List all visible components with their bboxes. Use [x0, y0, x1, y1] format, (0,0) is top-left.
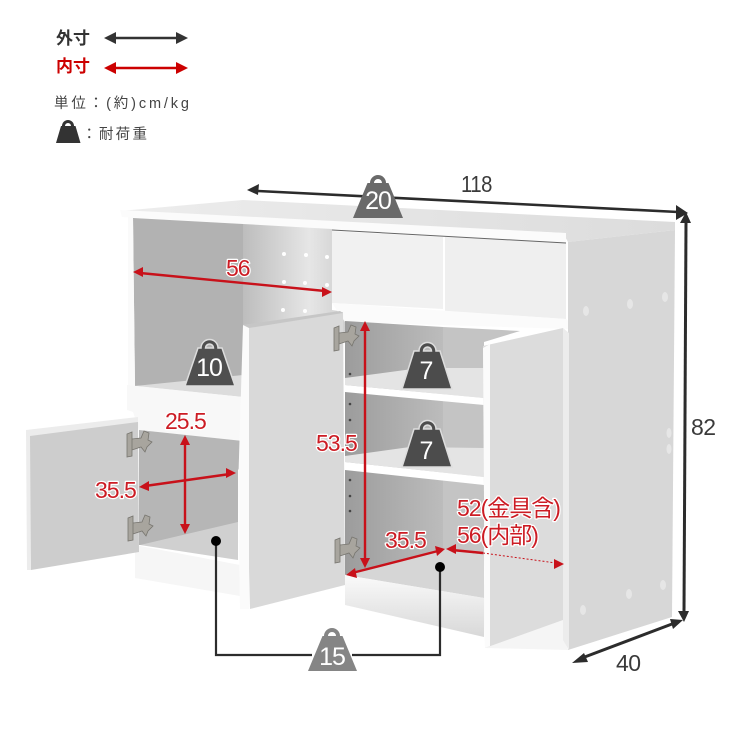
legend: units: 単位：(約)cm/kg [54, 95, 189, 112]
weight 10 [185, 340, 235, 386]
centre-right compartment left back wall [345, 321, 443, 575]
centre open compartment back [243, 224, 345, 340]
right side panel [568, 230, 675, 650]
centre-right compartment floor [345, 549, 484, 598]
bottom compartment connector [216, 541, 440, 655]
centre door [238, 311, 345, 609]
side panel dowel marks [580, 292, 672, 615]
red dimension 56 width [133, 255, 332, 297]
weight 20: 20 [365, 187, 391, 215]
legend: load capacity label: ：耐荷重 [82, 126, 147, 143]
centre-right compartment right back wall [443, 327, 520, 555]
shelf surface [135, 375, 243, 397]
red dimension 35.5 left: 35.5 [95, 477, 136, 503]
height dimension 82 [678, 212, 716, 622]
connector dots [211, 536, 445, 572]
width dimension 118 [247, 171, 688, 220]
left open compartment back [133, 218, 243, 386]
upper shelf [345, 368, 484, 398]
weight 7 lower: 7 [420, 437, 433, 465]
red dimension 25.5 height [165, 408, 206, 534]
legend [54, 29, 189, 143]
right door floor [485, 620, 568, 650]
red dimension 25.5 height: 25.5 [165, 408, 206, 434]
legend: inner dimension label: 内寸 [56, 57, 90, 76]
white band under left shelf [127, 385, 243, 441]
red dimension 53.5 height [316, 321, 370, 568]
lower left compartment floor [140, 522, 238, 560]
left side panel [128, 217, 135, 386]
legend: outer dimension arrow [104, 32, 188, 44]
lower left base [135, 545, 240, 596]
drawer left [332, 231, 443, 309]
band under drawers [332, 303, 570, 329]
left door [26, 417, 139, 570]
right door [483, 328, 569, 650]
centre-right base [345, 575, 484, 637]
width dimension 118: 118 [461, 171, 492, 197]
cabinet illustration [26, 200, 675, 650]
weight 20 [353, 175, 403, 218]
weight 7 upper: 7 [420, 357, 433, 385]
lower shelf [345, 447, 484, 477]
drawer right [445, 237, 566, 319]
cabinet top surface [120, 200, 675, 242]
red dimension 35.5 right: 35.5 [385, 527, 426, 553]
red dimension 35.5 right [346, 527, 445, 578]
red dimension 52 and 56 depth: 56(内部) [457, 522, 538, 548]
red dimension 52 and 56 depth: 52(金具含) [457, 495, 560, 521]
hinges [127, 325, 360, 563]
legend: outer dimension label: 外寸 [56, 29, 90, 48]
depth dimension 40 [572, 619, 683, 676]
shadow line under top edge [332, 230, 566, 243]
red dimension 53.5 height: 53.5 [316, 430, 357, 456]
height dimension 82: 82 [691, 414, 716, 440]
weight 7 lower [402, 420, 452, 467]
weight 15: 15 [319, 643, 345, 671]
weight 10: 10 [196, 354, 222, 382]
red dimension 52 and 56 depth [446, 495, 564, 569]
weight 7 upper [402, 342, 452, 389]
legend: inner dimension arrow [104, 62, 188, 74]
lower left compartment back [139, 430, 243, 545]
red dimension 56 width: 56 [226, 255, 250, 281]
weight 15 [308, 628, 357, 671]
shelf pin holes [281, 252, 329, 313]
legend: weight icon [56, 120, 80, 143]
depth dimension 40: 40 [616, 650, 641, 676]
red dimension 35.5 left [95, 468, 236, 503]
top front edge [120, 210, 566, 243]
